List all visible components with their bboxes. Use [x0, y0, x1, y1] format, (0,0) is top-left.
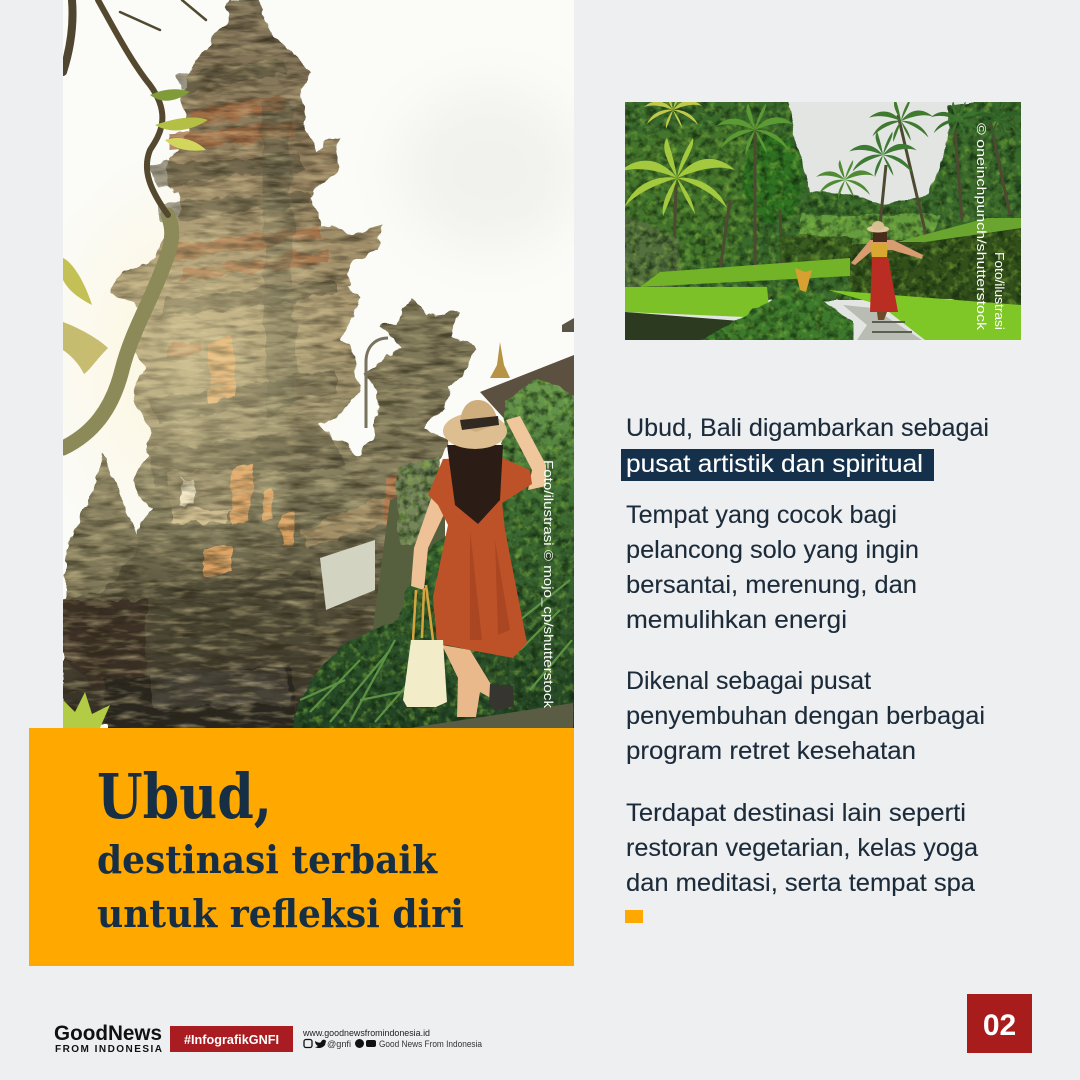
- orange walls: [204, 337, 295, 575]
- temple tiers: [145, 60, 345, 490]
- tree mass: [615, 90, 1030, 300]
- text block: other destinations: restoran vegetarian, kelas yoga: [626, 834, 978, 862]
- text block: healing centre: program retret kesehatan: [626, 737, 916, 765]
- gate wall: [300, 498, 386, 548]
- icon: youtube: [366, 1040, 376, 1047]
- lamp post: [366, 338, 388, 428]
- footer contact info: Good News From Indonesia: [379, 1039, 483, 1050]
- subtitle: untuk refleksi diri: [97, 891, 464, 936]
- dress: [428, 457, 532, 658]
- text block: healing centre: penyembuhan dengan berbagai: [626, 702, 985, 730]
- logo: GoodNews From Indonesia: FROM INDONESIA: [55, 1044, 162, 1055]
- shadowed wall behind woman: [373, 497, 445, 630]
- text block: healing centre: [626, 667, 985, 765]
- orange accent marker: [625, 910, 643, 923]
- raised arm: [506, 416, 546, 490]
- footer contact info: [302, 1028, 483, 1050]
- hair: [447, 445, 503, 524]
- legs: [443, 645, 491, 717]
- intro text with highlight: Ubud, Bali digambarkan sebagai: [626, 414, 989, 442]
- icon: facebook: [355, 1039, 364, 1048]
- footer contact info: www.goodnewsfromindonesia.id: [302, 1028, 430, 1039]
- orange flower: [795, 268, 812, 292]
- photo: temple and woman: [63, 0, 574, 728]
- photo credit: rice terraces: © oneinchpunch/shutterstock: [974, 123, 989, 331]
- yellow plant: [63, 692, 110, 728]
- terrace grass: [897, 218, 1021, 242]
- woman: [403, 400, 546, 717]
- text block: solo travellers: memulihkan energi: [626, 606, 847, 634]
- carved panel: [320, 540, 375, 610]
- text block: other destinations: dan meditasi, serta tempat spa: [626, 869, 975, 897]
- text block: solo travellers: pelancong solo yang ingin: [626, 536, 919, 564]
- logo: GoodNews From Indonesia: [54, 1022, 162, 1055]
- icon: twitter: [315, 1040, 326, 1048]
- left arm: [411, 496, 446, 590]
- tree branches: [63, 0, 206, 448]
- bag: [403, 585, 447, 707]
- photo credit: rice terraces: [974, 123, 1007, 331]
- hat: [443, 400, 507, 449]
- sky: [635, 102, 973, 340]
- right foliage and bushes: [292, 378, 590, 740]
- leaves: [63, 89, 208, 374]
- warm sunlight glow: [70, 164, 338, 554]
- small distant shrine: [64, 452, 138, 600]
- palms: [619, 138, 735, 216]
- logo: GoodNews From Indonesia: GoodNews: [54, 1022, 162, 1045]
- terraces and hedges: [625, 216, 1021, 305]
- subtitle: [97, 837, 464, 936]
- title: Ubud: Ubud,: [97, 760, 272, 833]
- woman walking: [851, 221, 923, 320]
- text block: solo travellers: bersantai, merenung, dan: [626, 571, 917, 599]
- main temple tower: [63, 0, 440, 740]
- roof right: [480, 355, 574, 425]
- text block: other destinations: [626, 799, 978, 897]
- text block: other destinations: Terdapat destinasi lain seperti: [626, 799, 966, 827]
- intro text with highlight: [621, 414, 989, 481]
- title panel: [29, 728, 574, 966]
- ground wedge: [410, 703, 573, 728]
- icon: instagram: [304, 1040, 312, 1048]
- page number: 02: [983, 1009, 1016, 1042]
- photo: rice terraces: [625, 102, 1021, 340]
- carved box: [170, 470, 232, 508]
- foreground plants: [700, 284, 854, 340]
- hashtag badge: [170, 1026, 293, 1052]
- grass blades: [300, 580, 572, 722]
- page number: [967, 994, 1032, 1053]
- text block: healing centre: Dikenal sebagai pusat: [626, 667, 871, 695]
- footer contact info: @gnfi: [327, 1039, 351, 1050]
- hashtag badge: #InfografikGNFI: [184, 1033, 279, 1047]
- stone path: [843, 305, 922, 340]
- right temple tower: [360, 298, 476, 464]
- photo credit: rice terraces: Foto/ilustrasi: [992, 252, 1007, 330]
- lower terrace: [145, 570, 318, 619]
- text block: solo travellers: [626, 501, 919, 634]
- intro text with highlight: pusat artistik dan spiritual: [626, 450, 923, 478]
- photo credit: temple: Foto/ilustrasi © mojo_cp/shutterstock: [541, 460, 556, 709]
- subtitle: destinasi terbaik: [97, 837, 438, 882]
- text block: solo travellers: Tempat yang cocok bagi: [626, 501, 897, 529]
- palm trunks: [673, 115, 1010, 285]
